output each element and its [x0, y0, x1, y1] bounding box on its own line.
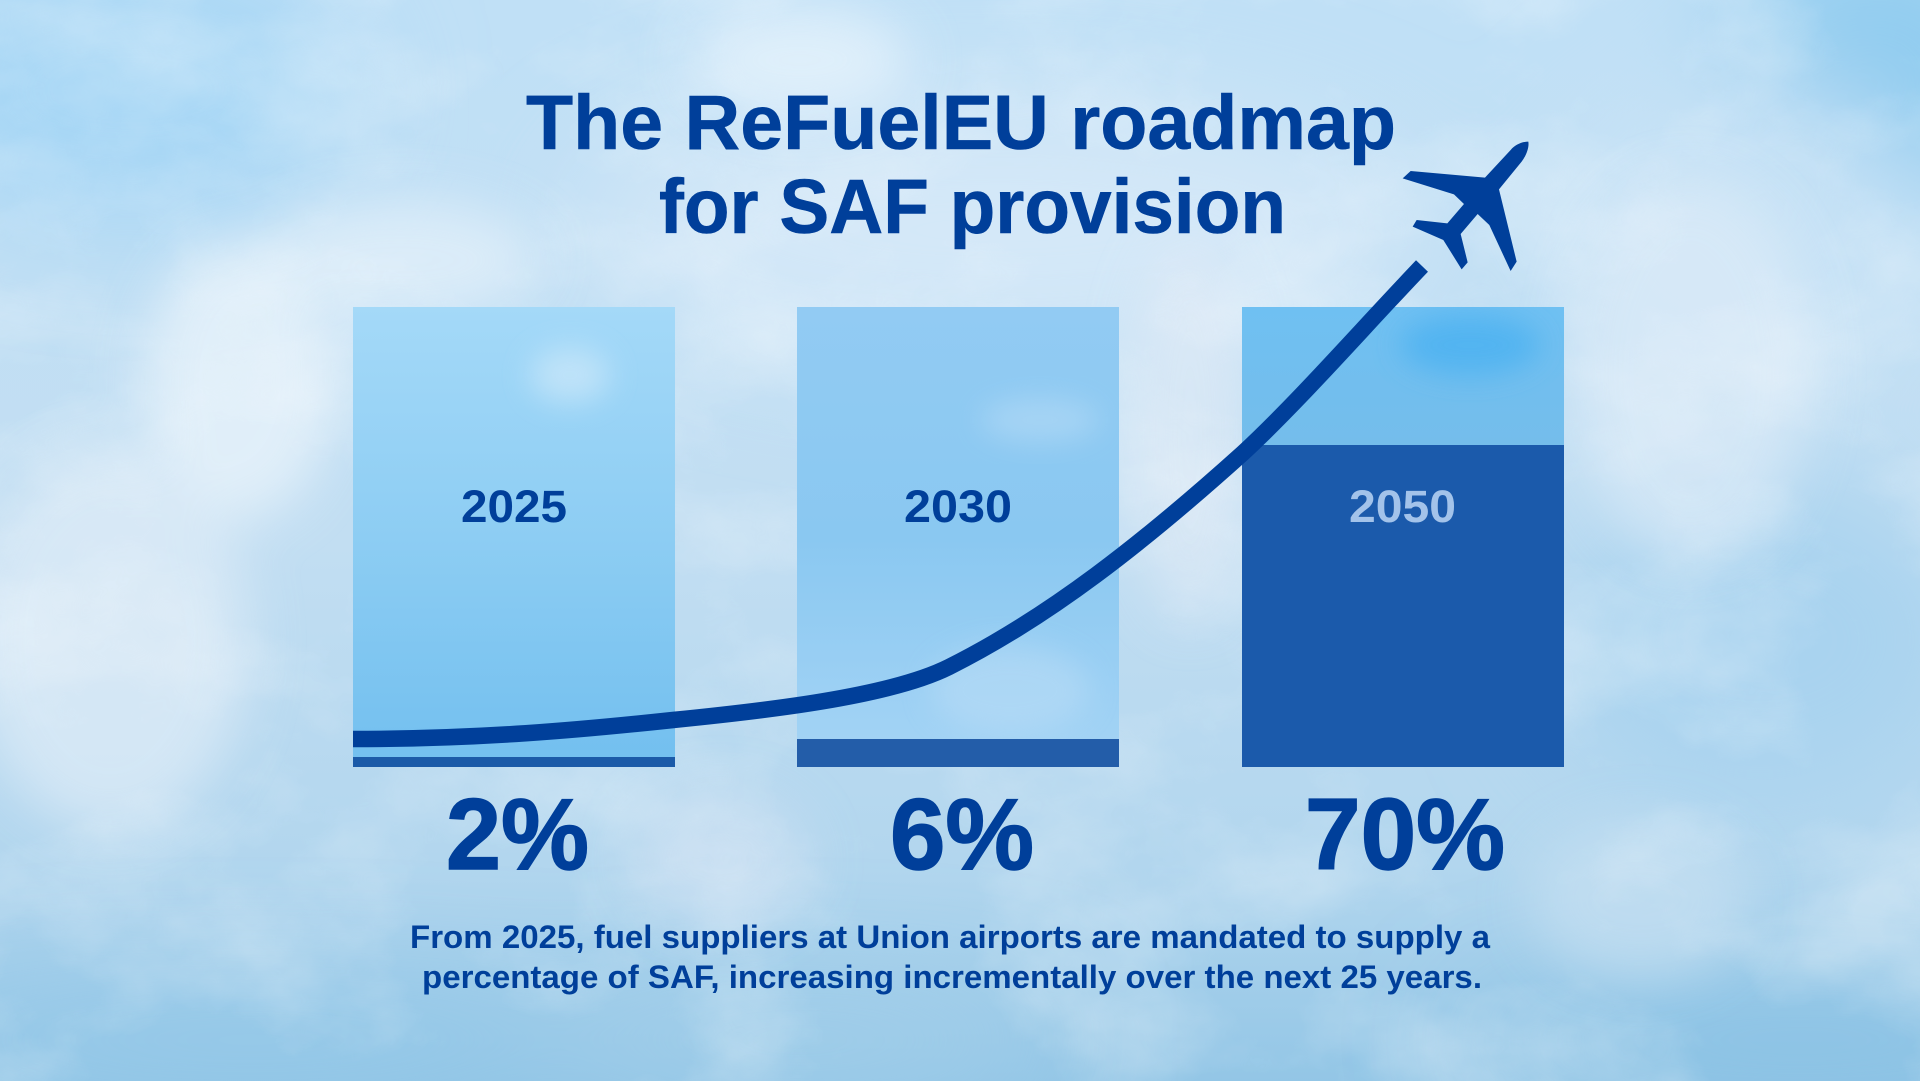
title: for SAF provision [659, 164, 1286, 250]
description text: From 2025, fuel suppliers at Union airports are mandated to supply a [410, 919, 1490, 955]
title: The ReFuelEU roadmap [526, 80, 1396, 166]
panel: 2025 bar [353, 307, 675, 767]
year label: 2030: 2030 [904, 481, 1012, 532]
2030 filled level [797, 739, 1119, 767]
description text: percentage of SAF, increasing incrementally over the next 25 years. [422, 959, 1482, 995]
value: 6%: 6% [890, 779, 1034, 891]
value: 70%: 70% [1305, 779, 1505, 891]
year label: 2025: 2025 [461, 481, 567, 532]
icon: airplane [1403, 142, 1529, 271]
panel: 2050 bar [1242, 307, 1564, 767]
2050 filled level [1242, 445, 1564, 767]
year label: 2050: 2050 [1349, 481, 1456, 532]
title [526, 80, 1396, 250]
2025 filled level [353, 757, 675, 767]
description text [410, 919, 1490, 995]
value: 2%: 2% [446, 779, 589, 891]
growth curve [353, 266, 1422, 739]
panel: 2030 bar [797, 307, 1119, 767]
